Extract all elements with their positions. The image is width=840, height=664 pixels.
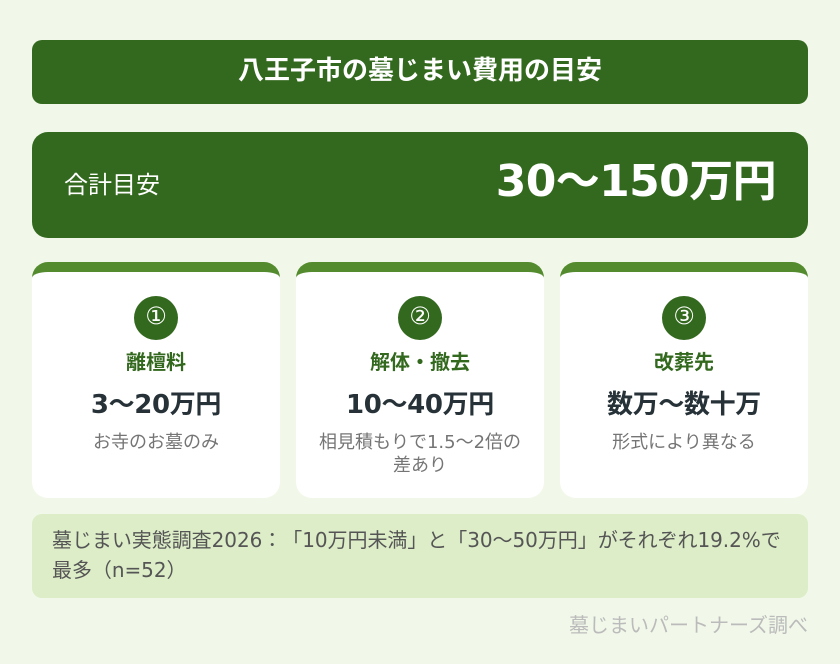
icon: number 2	[398, 296, 442, 340]
card 3 amount: 数万～数十万	[607, 390, 761, 420]
icon: number 3	[662, 296, 706, 340]
card 3 heading: 改葬先	[654, 350, 714, 374]
icon: number 2: ②	[409, 302, 431, 330]
icon: number 3: ③	[673, 302, 695, 330]
callout: survey note	[32, 514, 808, 598]
card 1 description: お寺のお墓のみ	[93, 432, 219, 453]
callout: survey note: 墓じまい実態調査2026：「10万円未満」と「30～50万円」がそれぞれ19.2%で最多（n=52）	[52, 528, 781, 582]
card 2 description: 相見積もりで1.5～2倍の差あり	[319, 432, 521, 476]
card 1 heading: 離檀料	[126, 350, 186, 374]
panel: card 2	[296, 262, 544, 498]
icon: number 1: ①	[145, 302, 167, 330]
total label: 合計目安	[64, 171, 160, 199]
panel: card 3	[560, 262, 808, 498]
card 2 heading: 解体・撤去	[370, 350, 470, 374]
title	[32, 40, 808, 104]
total amount: 30～150万円	[496, 156, 776, 207]
card 2 amount: 10～40万円	[346, 390, 494, 420]
icon: number 1	[134, 296, 178, 340]
panel: card 1	[32, 262, 280, 498]
card 1 amount: 3～20万円	[91, 390, 221, 420]
title: 八王子市の墓じまい費用の目安	[238, 56, 602, 86]
panel: total estimate	[32, 132, 808, 238]
source credit: 墓じまいパートナーズ調べ	[569, 613, 808, 637]
card 3 description: 形式により異なる	[612, 432, 756, 453]
